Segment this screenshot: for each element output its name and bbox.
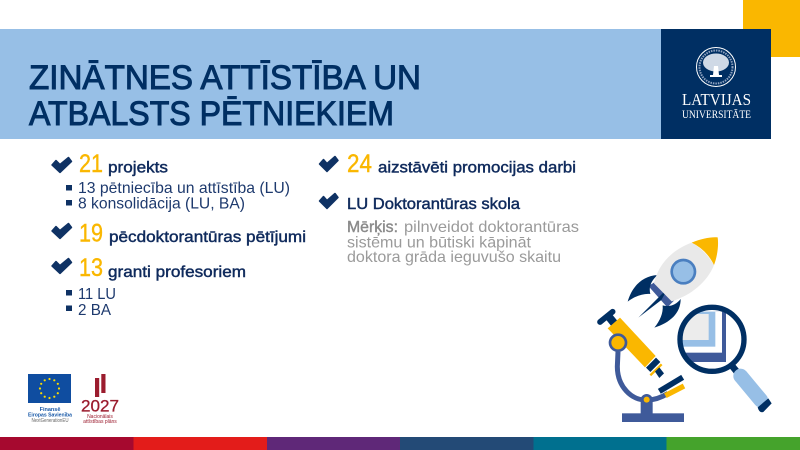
- item: 24 aizstāvēti promocijas darbi: 24: [347, 150, 372, 178]
- colour bar: [0, 437, 800, 450]
- icon: magnifying glass: [677, 307, 772, 412]
- logo: EU NextGenerationEU: Eiropas Savienība: [28, 412, 73, 418]
- logo: EU NextGenerationEU: NextGenerationEU: [32, 418, 69, 424]
- item: 13 granti profesoriem: 11 LU: [78, 286, 116, 303]
- item: 21 projekts: [52, 150, 290, 212]
- title: [29, 59, 421, 133]
- goal text: pilnveidot doktorantūras: [404, 219, 579, 236]
- item: 19 pēcdoktorantūras pētījumi: [52, 220, 306, 248]
- item: 13 granti profesoriem: granti profesoriem: [108, 264, 246, 281]
- icon: microscope: [600, 312, 684, 422]
- goal text: sistēmu un būtiski kāpināt: [347, 234, 532, 252]
- item: 13 granti profesoriem: [52, 254, 246, 319]
- goal text: [347, 219, 579, 266]
- title: ATBALSTS PĒTNIEKIEM: [29, 95, 394, 133]
- icon: rocket: [628, 237, 718, 328]
- logo: Latvijas Universitāte: UNIVERSITĀTE: [682, 107, 751, 121]
- item: LU Doktorantūras skola: LU Doktorantūras skola: [347, 196, 520, 213]
- icon: university seal with oak tree: [696, 48, 736, 86]
- logo: Nacionālais attīstības plāns 2027: 2027: [81, 396, 119, 416]
- item: 21 projekts: 8 konsolidācija (LU, BA): [78, 196, 245, 212]
- item: 21 projekts: 21: [79, 150, 103, 178]
- item: 21 projekts: projekts: [108, 160, 168, 176]
- item: 19 pēcdoktorantūras pētījumi: pēcdoktorantūras pētījumi: [109, 229, 306, 246]
- illustration: science icons: [600, 237, 772, 422]
- item: 21 projekts: 13 pētniecība un attīstība (LU): [78, 180, 290, 197]
- item: 24 aizstāvēti promocijas darbi: aizstāvēti promocijas darbi: [378, 160, 576, 176]
- logo: Nacionālais attīstības plāns 2027: [81, 374, 119, 425]
- icon: EU stars: [39, 378, 60, 399]
- title: ZINĀTNES ATTĪSTĪBA UN: [29, 59, 421, 97]
- item: 24 aizstāvēti promocijas darbi: [320, 150, 576, 178]
- yellow corner square: [743, 0, 800, 57]
- logo: Nacionālais attīstības plāns 2027: attīstības plāns: [83, 419, 117, 425]
- item: LU Doktorantūras skola: [320, 194, 579, 266]
- logo: Nacionālais attīstības plāns 2027: Nacionālais: [87, 414, 113, 420]
- logo: EU NextGenerationEU: Finansē: [40, 407, 60, 413]
- logo: EU NextGenerationEU: [28, 374, 73, 424]
- title banner: [0, 29, 662, 139]
- logo: Latvijas Universitāte: [661, 29, 771, 139]
- item: 19 pēcdoktorantūras pētījumi: 19: [79, 220, 103, 248]
- goal text: Mērķis:: [347, 219, 398, 236]
- item: 13 granti profesoriem: 2 BA: [78, 302, 111, 319]
- logo: Latvijas Universitāte: LATVIJAS: [682, 90, 751, 109]
- goal text: doktora grāda ieguvušo skaitu: [347, 249, 561, 266]
- item: 13 granti profesoriem: 13: [79, 254, 103, 282]
